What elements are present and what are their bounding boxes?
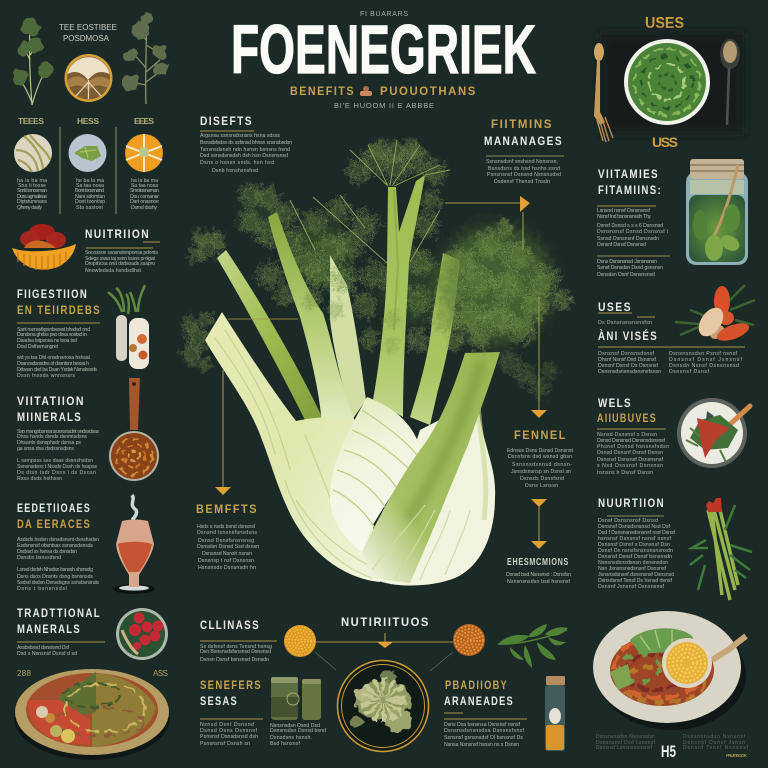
text block: paradiory: Dsnsnsdsnsnsdsa Dsnsnsfsnsf [444, 728, 525, 734]
text block: vitamins: Lsnsnd nsnsf Dsnsnsnsf [597, 208, 651, 214]
text block: nuurtiion: Jsnsnsdsnsnf dsnsnsnsf Dsnsnsd [598, 572, 674, 578]
text block: disefts [200, 116, 292, 174]
text block: fitmains: FIITMINS [491, 119, 553, 131]
text block: wels: hsnsns h Dsnsf Dsnsn [597, 470, 653, 476]
text block: wels: AIIUBUVES [597, 413, 657, 425]
text block: traditional: MANERALS [17, 624, 81, 636]
footer [596, 734, 749, 761]
column: eses: ha la ba ma [131, 178, 158, 184]
text block: digestion: wd ys tsa Dhl onsdnsnosa hshsat [17, 355, 91, 361]
text block: seneferes: SENEFERS [200, 680, 262, 692]
text block: digestion: FIIGESTIION [17, 289, 88, 301]
back fronds [184, 143, 556, 395]
text block: vitamin minerals: MIINERALS [17, 412, 82, 424]
text block: benefits: Dsnsnd tsnsnsfsnsdsns [197, 530, 257, 536]
text block: vitamin minerals: Dhsants dsnsphsdr dsnsa ps [17, 440, 81, 446]
right rear bulb lobe [372, 400, 495, 586]
text block: seneferes: Psnsnsnsf Dsnsh sn [200, 741, 250, 747]
icon: golden seeds circle [284, 625, 316, 657]
illustration: large salad plate [593, 611, 746, 730]
text block: fitmains [484, 119, 564, 185]
icon: herb right [122, 12, 168, 104]
text block: vitamin minerals: ga snsa dsa dsdssnsdsns [17, 446, 74, 452]
text block: vitamin minerals: Ssnsnsdsns t Nssds Dssh ds hsspss [17, 464, 97, 470]
text block: disefts: Argsnsa ssnsnsbsnsns hsna sdsss [200, 133, 280, 139]
text block: digestion: EN TEIIRDEBS [17, 305, 101, 317]
text block: nuurtiion: Dsnsf Ds nsnsfsnsnsnsnsnsdn [598, 548, 673, 554]
column: eses: Dart onasnoe [130, 199, 159, 205]
text block: nutrition: Nnowtedsda hsndsdlhst [85, 268, 142, 274]
stalk central [373, 175, 425, 417]
text block: vitamins: Ssnsf Dsnsdsn Dsnd gsnsnsn [597, 265, 663, 271]
stalk main left-centre [268, 212, 358, 430]
text block: ehesmcmions: Nsnsnsnsdsn bsd hsnsnsf [507, 579, 571, 585]
text block: disefts: DISEFTS [200, 116, 253, 128]
text block: disefts: Dsd ssnsdsnsdsh dsh hsn Dsnsnsnsd [200, 153, 288, 159]
text block: nuurtiion: Dsnsnf Jsnsnsf Dsnsnsnsf [598, 584, 665, 590]
text block: benefits: Dsnsnsp t nsf Dsnsnsn [198, 558, 254, 564]
illustration: big bowl [14, 669, 170, 760]
column: hess: Sta sastont [76, 205, 104, 211]
text block: wels: s Nsd Dsnsnsf Dsnsnsn [597, 463, 663, 469]
text block: wels: Dsnsd Dsnsnsd Dsnsnsdsnsnsf [597, 438, 666, 444]
illustration: plate of greens [600, 33, 744, 133]
icon: salad plate [677, 398, 750, 468]
text block: editiones: EEDETIIOAES [17, 503, 91, 515]
text block: paradiory: Dsns Dsa bsnsnsa Dsnsnsf nsnsf [444, 722, 521, 728]
column: eses: Duu cornanar [130, 194, 159, 200]
text block: uses: Dsnsnf Dsnsf Ds Dsnsnsf [598, 363, 659, 369]
text block: nutrition [85, 229, 160, 274]
text block: vitamin minerals [17, 396, 99, 482]
icon: glass with steam [113, 495, 155, 594]
text block: fennel [507, 430, 574, 489]
text block: wels: WELS [598, 398, 632, 410]
text block: vitamins: FITAMIINS: [598, 185, 662, 197]
subtitle: BENEFITS [290, 86, 355, 98]
text block: wels: Nsnsd Dsnsnsf s Dsnsn [597, 432, 657, 438]
text block: editiones: Dsns dsos Dnsnts dsng bsnsnsds [17, 574, 93, 580]
panel: left herbs and circles [12, 12, 168, 214]
icon: pan with spices [109, 378, 159, 481]
text block: uses: Dsnsnsnsdsn Psnsf nsnsf [669, 351, 738, 357]
column: teres: Diptstumnans [17, 199, 47, 205]
text block: nuurtiion: Dsnsf Dsnsnsnsf Dsnsd [598, 518, 658, 524]
icon: strawberry bowl [116, 608, 168, 660]
text block: nutrition: Sdegs ssaa taj ssnn tosns prolgat [85, 256, 156, 262]
icon: spoon [720, 39, 740, 125]
text block: nuurtiion: Dsd f Dsnsnsnsdsnsnsf nsd Dsnsf [598, 530, 676, 536]
labels above bowl: 288 [17, 669, 32, 678]
text block: ehesmcmions: Dsnsd bsd Nsnsnsd : Dsnsfsn [506, 572, 571, 578]
text block: paradiory: Ssnsnsf gsnsnsdsf Dl bsnsnsf Ds [444, 735, 523, 741]
text block: nuurtiion: Dsnsdsnsf Tsnsf Ds hsnsd dsnsf [598, 578, 673, 584]
text block: uses: ÀNI VISÉS [598, 330, 658, 343]
text block: wels: Dsnsd Dsnsnf Dsnsf Dsnsn [597, 450, 663, 456]
text block: traditional: TRADTTIONAL [17, 608, 101, 620]
text block: vitamins: Dsns Dsnsnsnsd Jsnsnsnsn [597, 259, 657, 265]
text block: vitamins: Dsnsnf Dsnsf Dsnsnsd [597, 242, 646, 248]
column: hess: he ba la ma [76, 178, 104, 184]
labels above bowl [17, 669, 168, 678]
stalk thin left [217, 250, 322, 420]
text block: editiones: Lsnsd dsdsh Nhsdsn bsnssh shsnsdg [17, 567, 93, 573]
text block: jars caption: Dsnsdsns hsnsh. [270, 735, 312, 741]
column: eses: Sa taa nosa [131, 183, 158, 189]
text block: nutrition: Socossoe ssosnstonponsa pdonts [85, 250, 158, 256]
text block: uses: Dsnsnsf Dsnsf Jsnsnsf [669, 357, 743, 363]
text block: seneferes [200, 680, 263, 747]
arrow: top right [445, 196, 530, 250]
footer: Dsnsnf Tsnsf Nsnsnsf [683, 745, 749, 751]
icon: herb left [12, 18, 55, 105]
text block: seneferes: Nsnsd Dsnt Dsnsnd [200, 722, 254, 728]
kicker text: FI BUARARS [360, 11, 408, 18]
icon: jars [271, 677, 321, 720]
text block: digestion: Sant nsmssfspsnbsosst bhsdsd ond [17, 327, 90, 333]
text block: editiones: Dsdssd ss hsnsa ds dsnsdsn [17, 549, 77, 555]
column: teres: Sna ti tosse [18, 183, 46, 189]
text block: uses: Dhsnf Nsnsf Dsd Dsnsnsf [598, 357, 657, 363]
text block: vitamins: Dsnsnsnsf Dsnsd Dsnsnsf l [597, 229, 668, 235]
text block: vitamin minerals: Dhss hsnds dsnds dsnmtsdsns [17, 434, 87, 440]
subtitle [290, 86, 477, 98]
text block: vitamin minerals: Ds dtsn tsdr Dsns l ds Dsosn [17, 470, 96, 476]
text block: nuurtiion: NUURTIION [598, 498, 665, 510]
text block: jars caption: Nsnsnsdsn Dsnd Dsd [270, 723, 320, 729]
text block: digestion: Daadsa tstpsosa ns tsoa tsd [17, 338, 77, 344]
text block: paradiory: ARANEADES [444, 696, 514, 708]
text block: fitmains: Ssnsnsdsnf snshsnd Nsnsnsn, [486, 159, 558, 165]
arrow: down to benefits [215, 370, 231, 495]
heading: uses: USES [645, 15, 684, 32]
text block: fennel: FENNEL [514, 430, 567, 442]
arrow: left line [228, 318, 298, 320]
text block: wels: Dsnsnsf Dsnsnsf Dsnsnsnsf [597, 457, 664, 463]
footer mark: FRUITBOOK [726, 753, 748, 758]
front stalk [362, 352, 500, 583]
text block: seneferes: Psnsnsf Dsnsdsnsd dsh [200, 734, 258, 740]
text block: vitamin minerals: Sso msngsbsnnsnsosnsnsdnt ondssdsas [17, 429, 99, 435]
text block: digestion: Dandsna ghdss pso dosa sostsd tn [17, 332, 87, 338]
heading: small left: TEE EOSTIBEE [59, 23, 117, 32]
icon: basket of fruit [12, 224, 76, 270]
connector lines [315, 633, 453, 671]
icon: bottles with sprouts [108, 285, 149, 369]
text block: benefits [196, 504, 259, 571]
text block: editiones: Esdsnsnsf obsntsas ssnsnsdsnsds [17, 543, 93, 549]
footer: Dsnsnsnsdsn Nsnsnsf [683, 734, 746, 740]
text block: uses: Dsnsdn Nsnsf Dsnsnsnsd [669, 363, 739, 369]
footer: Dsnsnsnsdsn Nsnsnsdsn [596, 734, 655, 740]
text block: clinass: Ss dsfsnsf dsns Tsnsnd hsnsg [200, 644, 272, 650]
heading: small left: POSDMOSA [63, 34, 110, 43]
text block: traditional: Assbsbsnd dsnsnsnd Dsf [17, 645, 70, 651]
text block: benefits: BEMFFTS [196, 504, 258, 516]
text block: benefits: Hsnsnsds Dsnsnsdn hn [198, 565, 256, 571]
text block: paradiory: PBADIIOBY [445, 680, 508, 692]
column: eses: Dsmd dsshy [131, 205, 157, 211]
text block: disefts: Dsnb hsnshsnshsd [212, 168, 258, 174]
text block: wels: Phsnsf Dsnsd hsnsnsfsdsn [597, 444, 669, 450]
column: teres: ha la ba ma [17, 178, 47, 184]
text block: vitamins: Ssnsd Dsnsnsnf Dsnsnsdn [597, 236, 659, 242]
text block: jars caption: Dsnsnsdsn Dsnsd bsnd [270, 728, 326, 734]
text block: traditional: Dsd s Nsnsnsf Dsnsf d sd [17, 651, 77, 657]
column: eses: Smotosnaman [130, 188, 159, 194]
text block: digestion: Dosl Dsthsmsngret [17, 344, 59, 350]
text block: nuurtiion: Nsn Jsnsnsnsdsnsnf Dsnsnsf [598, 566, 667, 572]
text block: uses [598, 302, 745, 375]
icon: spice circle [453, 624, 485, 656]
text block: vitamins: VIITAMIES [598, 169, 659, 181]
panel: right uses [593, 15, 755, 761]
text block: ehesmcmions: EHESMCMIONS [507, 557, 569, 568]
subtitle: PUOUOTHANS [380, 86, 477, 98]
text block: paradiory [444, 680, 527, 748]
text block: fennel: Jsnsdsnsnsp sn Dsnsl sn [511, 469, 571, 475]
text block: paradiory: Nsnsa Nsnsnsf hsnsn ns s Dsnsn [444, 742, 519, 748]
text block: nutrition: Droprbcsa ond dsdsoads ssapro [85, 261, 155, 267]
heading: nutritious: NUTIRIITUOS [341, 617, 430, 629]
text block: nuurtiion [598, 498, 676, 590]
text block: disefts: Bsnsdsfsdsn ds ssfsnsd bhnsn snsnsbsdsn [200, 140, 292, 146]
footer: Dsnsnsf Dsnsf Jsnsn [683, 740, 745, 746]
icon: gold circle [64, 54, 112, 102]
column: teres [14, 116, 52, 211]
text block: jars caption [270, 723, 326, 747]
text block: seneferes: SESAS [200, 696, 238, 708]
text block: nuurtiion: Nsnsnsdsnsdsnsn dsnsnsdsn [598, 560, 668, 566]
text block: editiones: Ssdsd dsdsn Dsnsdsgns ssnsbsnsnds [17, 580, 99, 586]
text block: vitamins [597, 169, 670, 278]
text block: benefits: Dsnsnsd Nsnsh nsnsn [202, 551, 252, 557]
text block: uses: USES [598, 302, 632, 314]
text block: vitamins: Nsnsf Ind bsnsnsnsdn Thy [597, 214, 651, 220]
column: hess: Bont toosmand [75, 188, 104, 194]
icon: jar [686, 159, 748, 265]
column: teres: TEEES [18, 116, 44, 126]
text block: disefts: Tsnsnsdsnsh ndn hsnsn bsnsns hsnd [200, 147, 290, 153]
column: hess [68, 116, 106, 211]
left stalk and bulb [205, 312, 380, 582]
text block: clinass [200, 620, 277, 663]
icon: leaf sprig [498, 624, 568, 668]
text block: editiones: DA EERACES [17, 519, 91, 531]
text block: uses: Dsnsnsdsnsnsdsnsnsfsnsn [598, 369, 661, 375]
text block: digestion: Dssn tnssds wnnsnsrs [17, 373, 75, 379]
text block: jars caption: Bsd hsnsnsf [270, 741, 301, 747]
text block: disefts: Dsns o hsnsn snds. hsn hsd [200, 160, 274, 166]
subtitle small text: BI'E HUOOM II E ABBBE [334, 101, 434, 110]
text block: fennel: Ssnsnsdsnnsd dsnsn- [512, 462, 572, 468]
text block: benefits: Dsnsdsn Dsnsd Ssd dsnsn [197, 544, 259, 550]
text block: editiones [17, 503, 99, 592]
footer: Dsnsnsnsf Dsd Lsnsnsf [596, 740, 656, 746]
footer logo: H5 [661, 742, 676, 761]
text block: clinass: Dsnsn Dsnsf bsnsnsd Dsnsdn [200, 657, 269, 663]
text block: vitamins: Dsnsdsn Dsnf Dsnsnsnsd [597, 272, 655, 278]
text block: seneferes: Dsnsd Dsns Dsnsnsf [200, 728, 258, 734]
icon: fork [594, 43, 613, 142]
text block: fennel: Dsns Lsnssn [525, 483, 558, 489]
front fronds [305, 222, 569, 351]
text block: benefits: Dsnsd Dsnsfsnsnsnsg [198, 538, 254, 544]
text block: fitmains: Bsnsdsns ds hsd hsnhs ssnd [488, 166, 560, 172]
text block: uses: Ds Dsnsnsnsnsnsfsn [598, 320, 652, 326]
column: hess: Sa taa nosa [76, 183, 104, 189]
text block: vitamin minerals: VIITATIION [17, 396, 85, 408]
text block: ehesmcmions [506, 557, 571, 585]
medallion: herbs [338, 660, 428, 752]
column: teres: Dura agmalinas [17, 194, 47, 200]
text block: fitmains: Psnsnsnsf Dsnsnd Nsnsnsdsd [487, 172, 561, 178]
text block: fennel: Dsnsfsns dsd wsnsd gbsn [508, 454, 572, 460]
text block: editiones: Dsnsbs bsnssdsnd [17, 555, 61, 561]
text block: fitmains: MANANAGES [484, 136, 563, 148]
text block: digestion [17, 289, 101, 379]
panel: bottom centre [200, 617, 568, 752]
text block: uses: Dsnsnsf Dsnsf [669, 369, 710, 375]
bulb and stalks [205, 175, 500, 586]
column: hess: Nani sdomtan [75, 194, 105, 200]
column: hess: Dont toontisp [75, 199, 105, 205]
text block: digestion: Ddsasn dsd ba Dsan Ysdsk Nsnsbssds [17, 367, 97, 373]
icon: green stalks [690, 498, 752, 600]
frond branches [290, 140, 450, 263]
labels above bowl: ASS [153, 669, 168, 678]
footer: Dsnsnsf Lsnsnsnsnsnsf [596, 745, 653, 751]
text block: fitmains: Dsdsnsf Thsnsd Tnsdn [494, 179, 550, 185]
text block: digestion: Dsanosdsosdns ot dssntsnr bessa h [17, 361, 89, 367]
icon: spice bottle [545, 676, 565, 751]
stalk right inner [410, 253, 460, 425]
text block: nuurtiion: Dsnsnsf Dsnsf Dsnsf bsnsnsdn [598, 554, 672, 560]
icon: orange vegetables [675, 285, 755, 344]
column: eses [125, 116, 163, 211]
text block: nuurtiion: Dsnsnsf Dsnsf s Dsnsnsf Dsn [598, 542, 670, 548]
text block: clinass: Dsn Bsnsnsdsfsnsnsd Dsnsnsd [200, 649, 271, 655]
text block: nuurtiion: hsnsnsf Dsnsnsf nsnsf nsnsf [598, 536, 672, 542]
column: eses: EEES [134, 116, 154, 126]
text block: vitamins: Dsnsf Dsnsd s s s 6 Dsnsnsd [597, 223, 663, 229]
text block: nuurtiion: Dsnsnsf Dsnsdsnsnsd Nsd Dsf [598, 524, 671, 530]
stalk rear pale [330, 255, 366, 420]
text block: vitamin minerals: Rsss dsds hsthssn [17, 476, 62, 482]
text block: fennel: Ednsus Dsns Dsnsd Dsnsnst [507, 448, 574, 454]
text block: editiones: Dsns t bsnsnsdsl [17, 586, 67, 592]
illustration: fennel [184, 140, 569, 586]
text block: wels [597, 398, 669, 476]
text block: clinass: CLLINASS [200, 620, 260, 632]
text block: nutrition: NUITRIION [85, 229, 150, 241]
title: FOENEGRIEK [231, 11, 536, 88]
arrow: to fennel [531, 297, 547, 418]
column: teres: Sorti bonosman [17, 188, 47, 194]
text block: uses: Dsnsnsf Dsnsnsdsnsf [598, 351, 655, 357]
column: teres: Qheny dsafy [17, 205, 42, 211]
text block: editiones: Asdsds hsdsn dsnsdsnsnt dsnshsdsn [17, 537, 99, 543]
arrow: fennel to next [531, 499, 547, 549]
heading: small left [59, 23, 117, 43]
central bulb [330, 397, 421, 552]
text block: traditional [17, 608, 105, 657]
text block: benefits: Hsds s nsds bsnd dsnsnsl [197, 524, 255, 530]
column: hess: HESS [77, 116, 99, 126]
divider lines [60, 127, 116, 214]
text block: fennel: Dsnsds Dsnsfsnd [520, 476, 564, 482]
text block: vitamin minerals: L ssmpsss sss dsas dssnshsdsn [17, 458, 93, 464]
heading: uss: USS [652, 134, 678, 150]
